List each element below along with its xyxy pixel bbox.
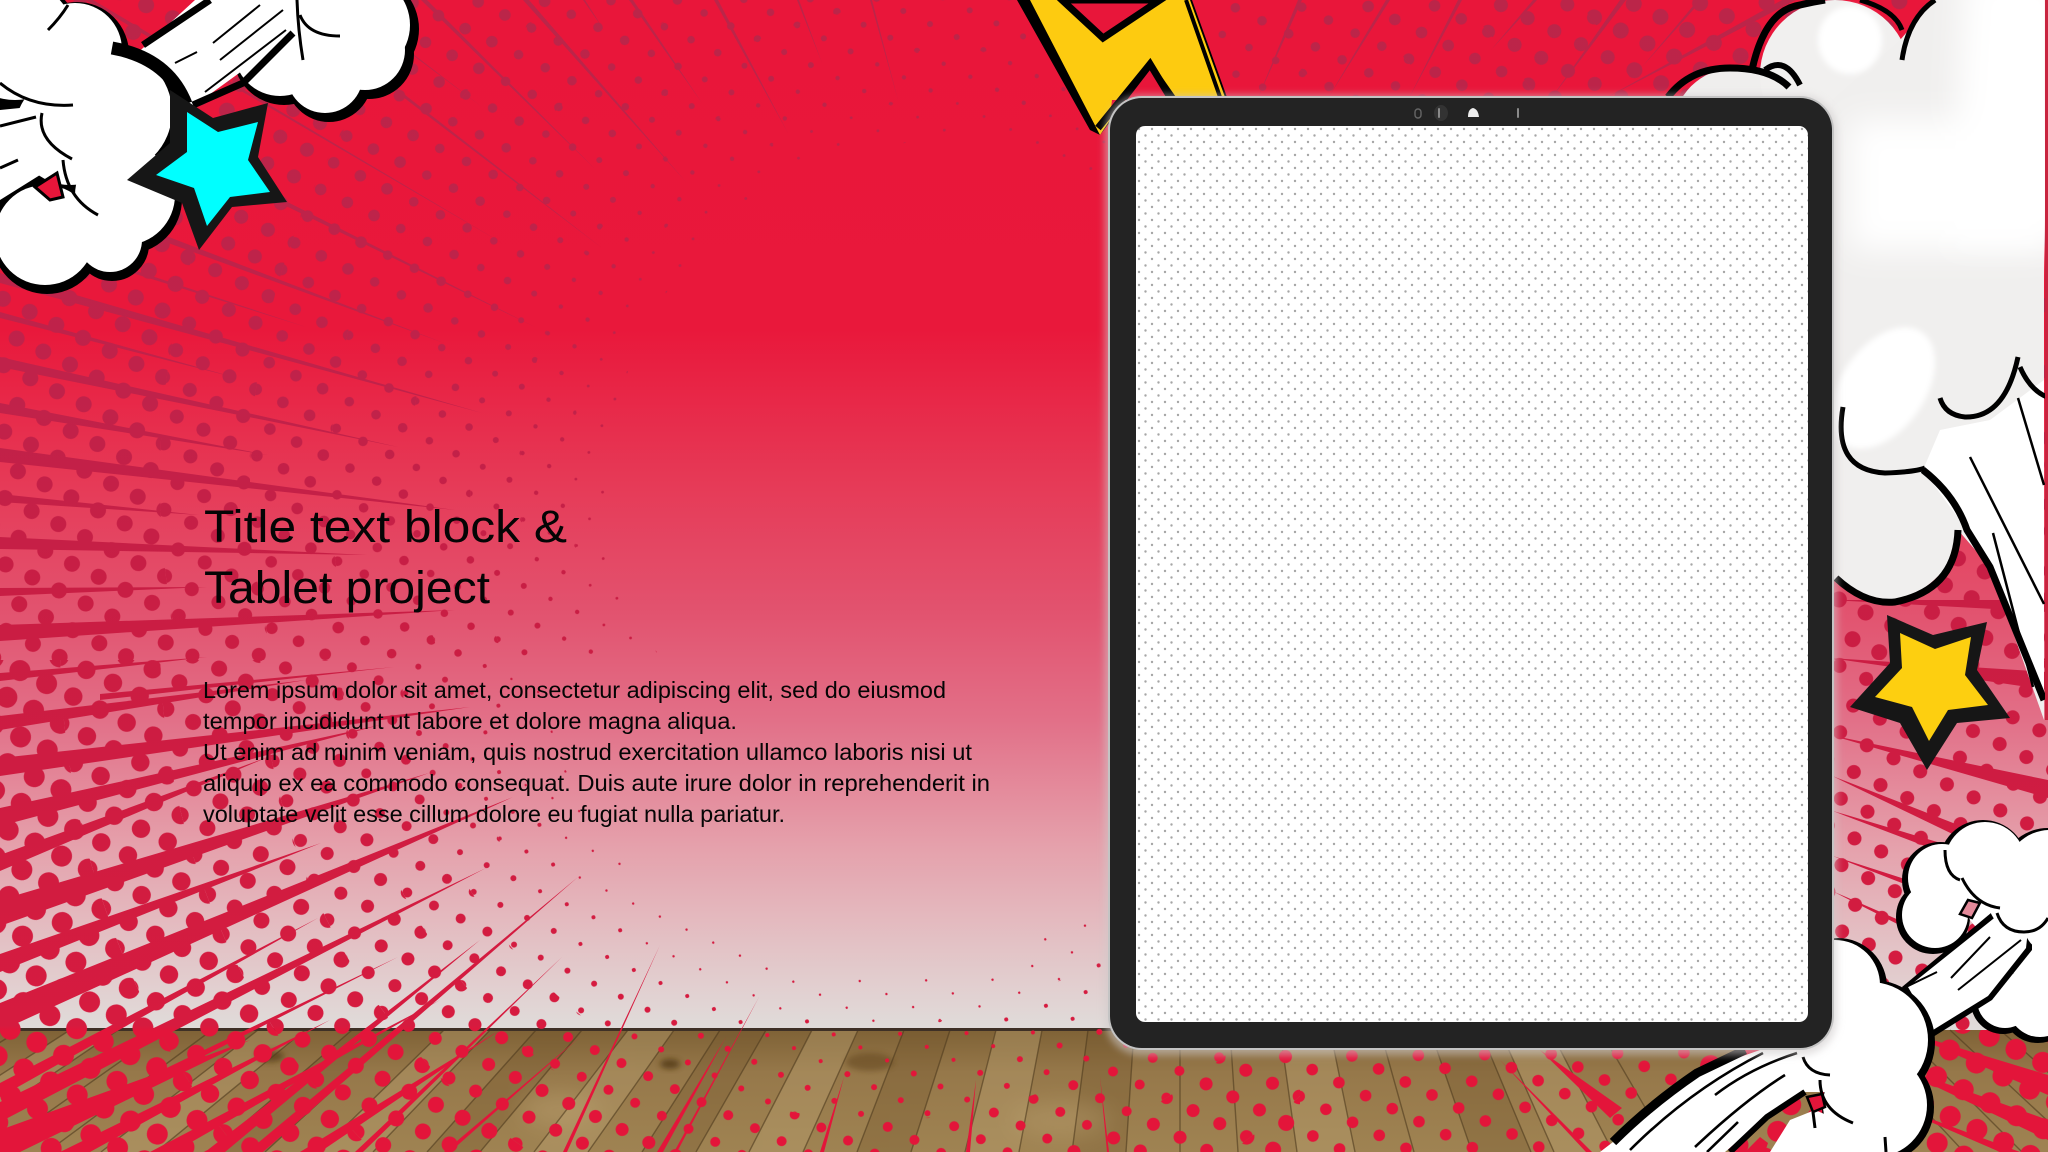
cloud: lower right small puff	[1900, 822, 2048, 1039]
speed streak: upper right	[1923, 380, 2044, 700]
cloud puff: top-left right puff	[234, 0, 414, 117]
cloud: top-left burst	[0, 0, 414, 289]
title: Tablet project	[204, 562, 491, 613]
body text block: Ut enim ad minim veniam, quis nostrud exercitation ullamco laboris nisi ut	[203, 739, 973, 765]
title: Title text block &	[204, 501, 567, 552]
right edge sliver	[2045, 0, 2048, 720]
body text block: tempor incididunt ut labore et dolore magna aliqua.	[203, 708, 737, 734]
wooden floor	[0, 1028, 2048, 1152]
body text block: Lorem ipsum dolor sit amet, consectetur adipiscing elit, sed do eiusmod	[203, 677, 946, 703]
body text block: voluptate velit esse cillum dolore eu fugiat nulla pariatur.	[203, 801, 785, 827]
body text block	[203, 677, 990, 827]
cloud puff: top-left main puff	[0, 0, 186, 289]
speed streak: bottom	[1600, 1048, 1840, 1152]
star: cyan	[127, 90, 287, 250]
tablet camera bar	[1415, 105, 1519, 121]
title	[204, 501, 567, 613]
cloud: lower right large burst	[1600, 940, 1931, 1152]
star: yellow	[1850, 615, 2010, 770]
lightning bolt	[1017, 0, 1228, 135]
speed streak: top-left	[130, 0, 298, 130]
body text block: aliquip ex ea commodo consequat. Duis aute irure dolor in reprehenderit in	[203, 770, 990, 796]
tablet device	[1105, 95, 1837, 1055]
tablet screen	[1136, 126, 1808, 1022]
cloud puff: top-left upper lobe cap	[297, 0, 402, 72]
cloud: upper right large burst	[1668, 0, 2048, 720]
